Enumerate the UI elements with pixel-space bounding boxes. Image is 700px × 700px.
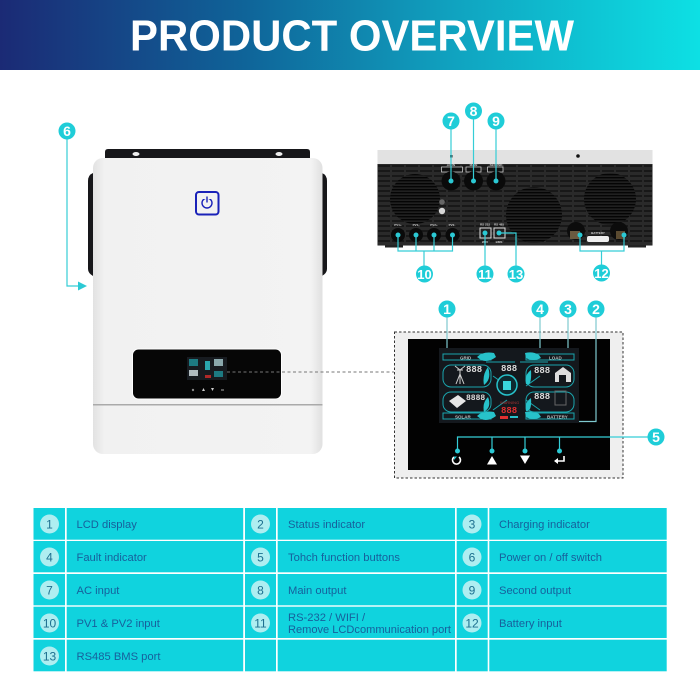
rear view of inverter: [378, 150, 652, 248]
dashed connector from front panel to zoom box: [227, 371, 394, 373]
rear chassis: [378, 164, 652, 246]
battery terminals: [567, 222, 628, 242]
row 3: Second output: [499, 585, 572, 597]
callout 6: power switch: [58, 122, 87, 290]
communication ports: WIFI: [482, 240, 488, 244]
callout 10: PV input: 10: [417, 267, 432, 282]
callout 4: fault indicator: [532, 300, 548, 348]
row 1: [34, 508, 667, 540]
battery label bar: BATTERY: [547, 414, 568, 420]
row 1: Charging indicator: [499, 519, 590, 531]
row 5: [34, 640, 667, 671]
inverter body: [93, 158, 322, 454]
callout 2: status indicator: [579, 300, 604, 422]
grid label bar: GRID: [460, 356, 472, 360]
rear top cover: [378, 150, 652, 164]
side handles: [88, 173, 93, 276]
row 4: Battery input: [499, 618, 563, 630]
callout 12: battery input: 12: [594, 266, 609, 281]
center readout: 888: [501, 364, 517, 374]
row 5: RS485 BMS port: [76, 651, 161, 663]
center battery ring: [497, 375, 517, 395]
AC terminals: [442, 163, 506, 190]
fault readout: [500, 400, 519, 419]
PV terminals: PV2+: [430, 223, 438, 227]
callout 13: BMS port: 13: [509, 267, 523, 282]
callout 2: status indicator: 2: [592, 301, 600, 317]
callout 5: function buttons: [455, 428, 664, 454]
AC terminals: MAIN: [470, 163, 477, 167]
fault readout: WARNING: [500, 400, 519, 405]
callout 1: LCD display: 1: [443, 301, 451, 317]
row 1: 2: [257, 518, 264, 532]
row 2: 4: [46, 550, 53, 564]
solar readout: 8888: [466, 394, 485, 403]
cooling fan grills: [390, 173, 636, 243]
solar label bar: SOLAR: [455, 414, 472, 420]
row 4: 11: [254, 616, 267, 630]
row 2: Tohch function buttons: [288, 552, 400, 564]
PV terminals: [391, 223, 460, 242]
row 5: 13: [43, 650, 56, 664]
callout 12: battery input: [578, 232, 626, 282]
PV terminals: PV2-: [449, 223, 455, 227]
load label bar: LOAD: [549, 356, 562, 360]
LCD screen: [439, 348, 579, 423]
row 3: 7: [46, 584, 53, 598]
load readout: 888: [534, 366, 550, 376]
display panel: [132, 349, 282, 399]
callouts 7 8 9: 9: [492, 113, 500, 129]
row 2: 6: [469, 550, 476, 564]
AC terminals: SECOND: [490, 163, 503, 167]
row 2: Fault indicator: [76, 552, 147, 564]
row 1: Status indicator: [288, 519, 365, 531]
row 3: 8: [257, 584, 264, 598]
battery readout: 888: [534, 392, 550, 402]
row 3: [34, 574, 667, 605]
callout 6: power switch: 6: [63, 123, 71, 139]
communication ports: [480, 222, 505, 244]
row 2: Power on / off switch: [499, 552, 602, 564]
row 4: PV1 & PV2 input: [76, 618, 161, 630]
row 1: 3: [469, 518, 476, 532]
row 3: 9: [469, 584, 476, 598]
callouts 7 8 9: 8: [470, 103, 478, 119]
PV terminals: PV1+: [394, 223, 402, 227]
row 4: 12: [465, 616, 479, 630]
callout 11: RS-232 port: [476, 230, 494, 282]
panel: enlarged control display: [394, 332, 623, 478]
row 2: [34, 541, 667, 572]
row 4: 10: [43, 616, 56, 630]
PV terminals: PV1-: [413, 223, 419, 227]
row 4: RS-232 / WIFI /: [288, 612, 366, 624]
mounting bracket: [105, 149, 310, 158]
indicator knobs: [439, 199, 445, 214]
callouts 7 8 9: [442, 102, 504, 184]
battery terminals: BATTERY: [591, 231, 605, 235]
grid readout: 888: [466, 365, 482, 375]
row 3: Main output: [288, 585, 347, 597]
communication ports: RS 232: [480, 222, 490, 226]
row 4: Remove LCDcommunication port: [288, 624, 452, 636]
row 1: 1: [46, 518, 53, 532]
callout 3: charging indicator: [560, 300, 576, 348]
callout 3: charging indicator: 3: [564, 301, 572, 317]
callout 4: fault indicator: 4: [536, 301, 544, 317]
callout 10: PV input: [396, 232, 455, 282]
power button icon: [196, 192, 218, 214]
communication ports: BMS: [496, 240, 502, 244]
callout 11: RS-232 port: 11: [478, 267, 492, 282]
row 3: AC input: [76, 585, 120, 597]
row 4: [34, 607, 667, 638]
touch buttons: [453, 456, 564, 464]
AC terminals: AC IN: [447, 163, 455, 167]
title: PRODUCT OVERVIEW: [130, 12, 574, 60]
legend table: [34, 508, 667, 671]
header banner: [0, 0, 700, 70]
communication ports: RS 485: [494, 222, 504, 226]
row 2: 5: [257, 550, 264, 564]
fault readout: 888: [501, 406, 517, 416]
callout 5: function buttons: 5: [652, 429, 660, 445]
callouts 7 8 9: 7: [447, 113, 455, 129]
front view of inverter: [88, 149, 327, 454]
callout 13: BMS port: [496, 230, 524, 282]
callout 1: LCD display: [438, 300, 456, 348]
row 1: LCD display: [76, 519, 137, 531]
